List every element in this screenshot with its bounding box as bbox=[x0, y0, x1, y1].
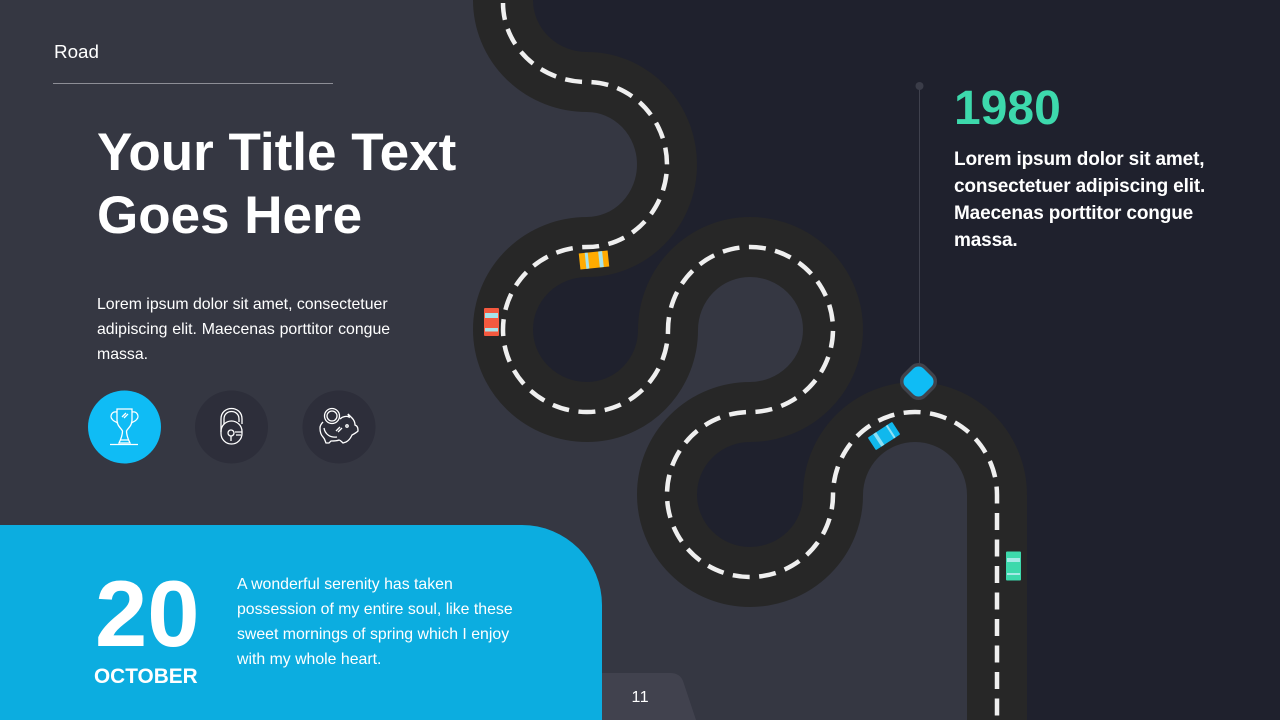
date number: 20 bbox=[95, 560, 200, 666]
year description: massa. bbox=[954, 230, 1018, 251]
car: red bbox=[484, 308, 499, 336]
panel text bbox=[237, 576, 513, 668]
panel text: possession of my entire soul, like these bbox=[237, 601, 513, 618]
title: Your Title Text bbox=[97, 123, 456, 182]
timeline marker bbox=[898, 82, 939, 402]
winding road bbox=[503, 0, 997, 720]
year description bbox=[954, 149, 1205, 251]
panel text: sweet mornings of spring which I enjoy bbox=[237, 626, 509, 643]
month: OCTOBER bbox=[94, 664, 198, 688]
intro text: Lorem ipsum dolor sit amet, consectetuer bbox=[97, 296, 388, 313]
intro text bbox=[97, 296, 390, 363]
intro text: massa. bbox=[97, 346, 148, 363]
car: orange bbox=[579, 251, 609, 269]
year description: Maecenas porttitor congue bbox=[954, 203, 1193, 224]
light ground area bbox=[0, 0, 997, 720]
icon: piggy bank bbox=[302, 390, 376, 464]
title: Goes Here bbox=[97, 186, 362, 245]
icon: padlock bbox=[195, 390, 268, 464]
panel text: with my whole heart. bbox=[237, 651, 381, 668]
year heading: 1980 bbox=[954, 82, 1061, 134]
road centre dashes bbox=[503, 3, 997, 720]
panel text: A wonderful serenity has taken bbox=[237, 576, 453, 593]
year description: Lorem ipsum dolor sit amet, bbox=[954, 149, 1204, 170]
date panel bbox=[0, 525, 602, 720]
icon: trophy bbox=[88, 390, 161, 464]
car: blue bbox=[868, 422, 900, 450]
intro text: adipiscing elit. Maecenas porttitor congue bbox=[97, 321, 390, 338]
car: green bbox=[1006, 552, 1021, 580]
title bbox=[97, 123, 456, 245]
page number: 11 bbox=[632, 689, 649, 706]
section label: Road bbox=[54, 41, 99, 62]
year description: consectetuer adipiscing elit. bbox=[954, 176, 1205, 197]
